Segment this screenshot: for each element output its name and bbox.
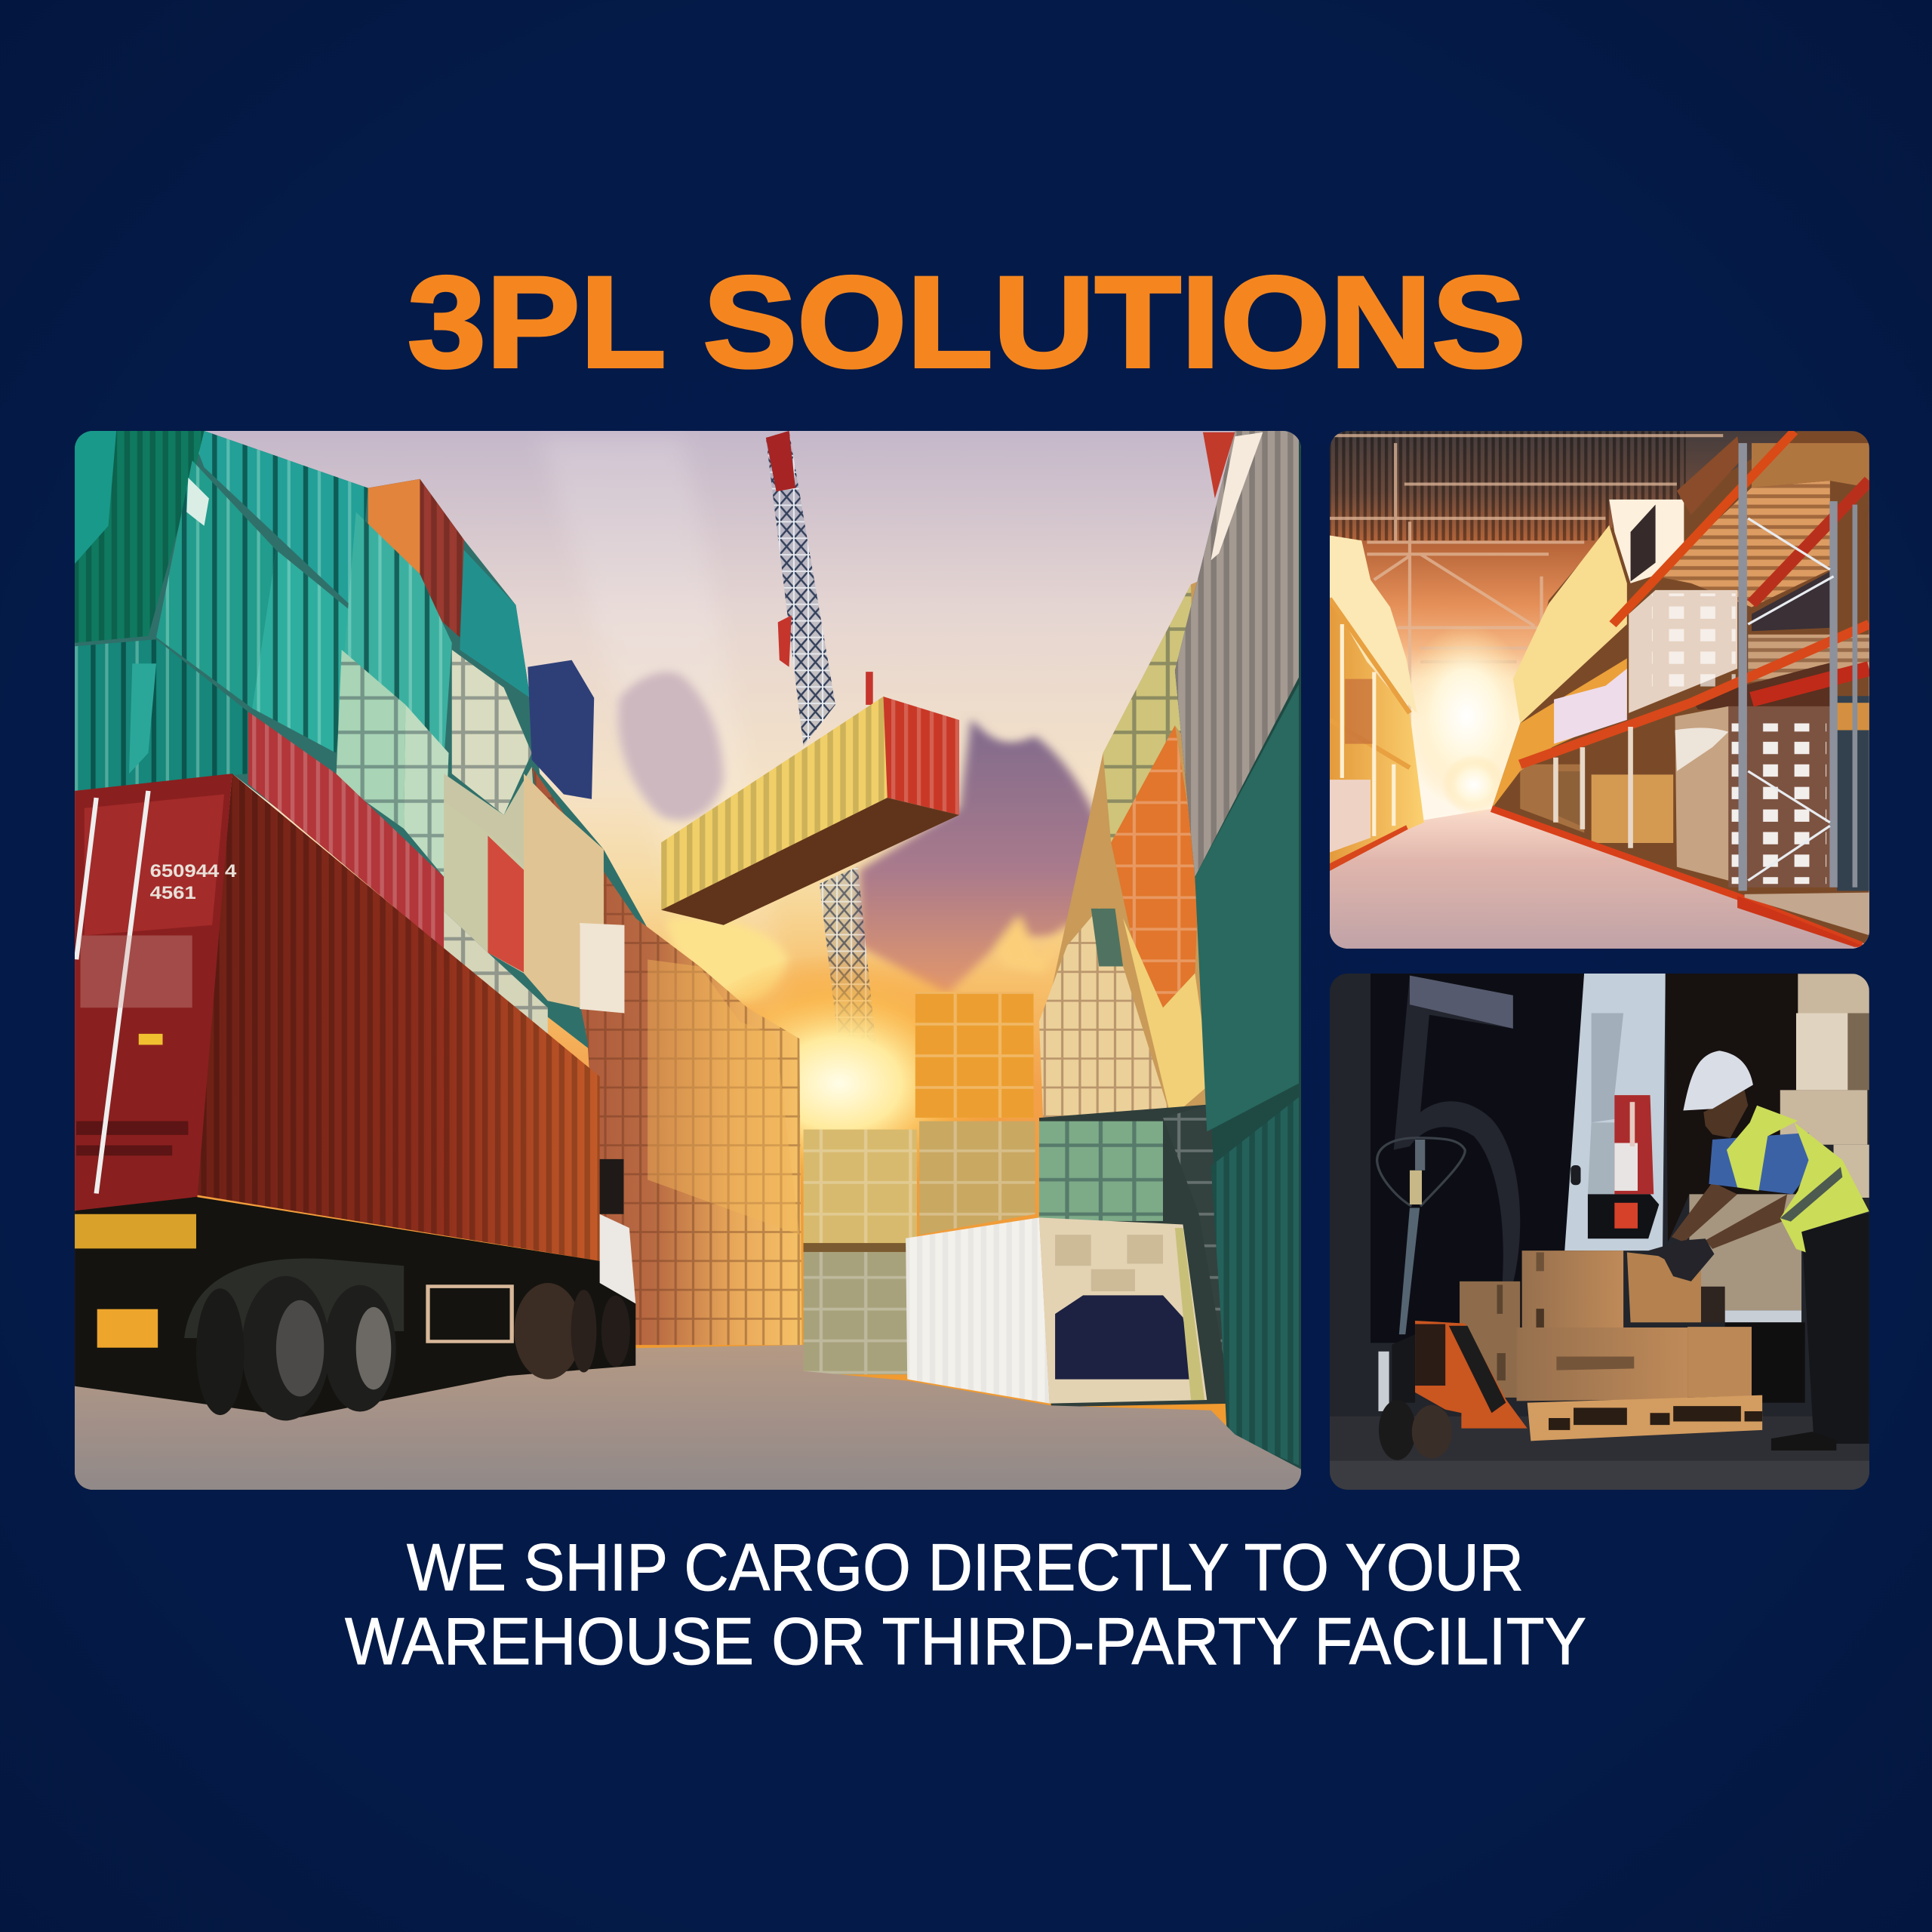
- left shelves: [1330, 535, 1424, 871]
- red truck container: 650944 4: [150, 862, 237, 881]
- floor: [1330, 1417, 1871, 1491]
- sky: [60, 423, 1313, 1502]
- right racks: stock, beams and columns: [1492, 431, 1869, 947]
- stacked boxes in van: [1689, 974, 1869, 1403]
- right stacked containers: [1039, 431, 1313, 1502]
- worker: [1648, 1051, 1869, 1451]
- blue container: [528, 660, 594, 799]
- subtitle: [345, 1530, 1586, 1678]
- worker shirt: [1709, 1133, 1810, 1194]
- white hanging sign: [580, 923, 624, 1013]
- clouds: [618, 672, 1111, 1002]
- pallet jack: [1377, 1138, 1527, 1460]
- worker boot: [1771, 1432, 1836, 1451]
- van door: [1564, 972, 1666, 1251]
- panel: worker loading boxes photo: [1321, 958, 1879, 1494]
- worker face: [1703, 1090, 1748, 1138]
- subtitle line 2: WAREHOUSE OR THIRD-PARTY FACILITY: [345, 1604, 1586, 1678]
- ceiling corrugation: [1330, 431, 1686, 540]
- backdrop shape: [1394, 976, 1520, 1283]
- sun glow: [728, 955, 958, 1176]
- far left container wall: [532, 767, 801, 1345]
- red truck container: 4561: [150, 884, 196, 903]
- left stack base: [75, 431, 651, 1097]
- cardboard boxes on pallet: [1460, 1251, 1752, 1401]
- ceiling trusses: [1330, 435, 1723, 826]
- ground: [60, 1345, 1313, 1502]
- worker trousers: [1801, 1213, 1869, 1444]
- aisle glow: [1399, 624, 1534, 816]
- worker arms: [1672, 1183, 1787, 1249]
- red truck container: [75, 774, 600, 1261]
- worker hard hat: [1683, 1051, 1753, 1110]
- truck chassis and wheels: [75, 1159, 635, 1420]
- white reefer container: [906, 1217, 1207, 1404]
- wooden pallet: [1527, 1395, 1762, 1441]
- hanging container: [661, 697, 959, 925]
- dark backdrop: [1321, 958, 1879, 1494]
- crane: [765, 431, 875, 1035]
- floor: [1321, 809, 1869, 958]
- title: 3PL SOLUTIONS: [408, 250, 1526, 395]
- right racking base: [1492, 431, 1869, 946]
- panel: container yard photo: [60, 423, 1313, 1502]
- centre containers: [804, 992, 1163, 1374]
- subtitle line 1: WE SHIP CARGO DIRECTLY TO YOUR: [407, 1530, 1524, 1604]
- dark truck panel: [1666, 972, 1798, 1242]
- panel: warehouse aisle photo: [1321, 423, 1879, 958]
- left stacked containers: [75, 431, 604, 1035]
- worker gloves: [1648, 1238, 1714, 1281]
- worker hi-vis vest: [1727, 1106, 1869, 1252]
- warehouse back wall and ceiling: [1321, 423, 1879, 958]
- sun rays: [554, 442, 785, 1012]
